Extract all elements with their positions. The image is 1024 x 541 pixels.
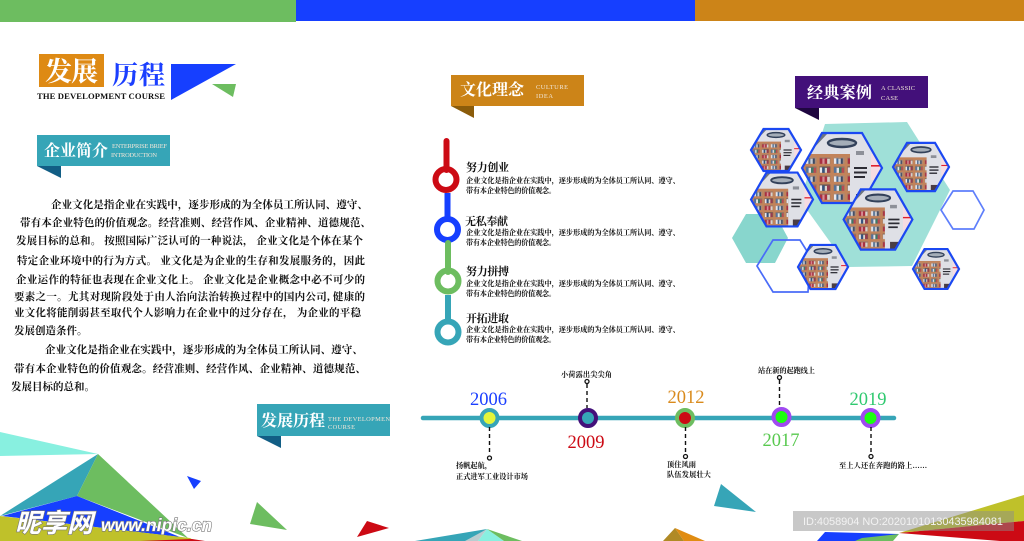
- heading ribbon: a classic case: 经典案例: [807, 83, 872, 102]
- text block: value 2: [465, 214, 680, 247]
- heading ribbon: culture idea: IDEA: [536, 93, 553, 100]
- text block: value 1: [465, 160, 680, 195]
- watermark: nipic logo: www.nipic.cn: [101, 515, 212, 535]
- text block: enterprise culture body copy: [11, 198, 371, 393]
- text block: value 1: 企业文化是指企业在实践中，逐步形成的为全体员工所认同、遵守、: [466, 176, 680, 186]
- text block: enterprise culture body copy: 特定企业环境中的行为方式。 业文化是为企业的生存和发展服务的，因此: [17, 254, 366, 267]
- timeline axis: [423, 416, 894, 420]
- decoration: scattered triangles: [187, 476, 756, 537]
- text block: value 4: 带有本企业特色的价值观念。: [465, 335, 556, 344]
- milestone 2012: 顶住风雨: [667, 460, 696, 469]
- text block: value 1: 努力创业: [466, 160, 509, 174]
- text block: value 1: 带有本企业特色的价值观念。: [465, 186, 556, 195]
- value marker: red: [436, 141, 456, 190]
- milestone 2019: 2019: [850, 390, 886, 410]
- text block: enterprise culture body copy: 业文化将能削弱甚至取代个人影响力在企业中的过分存在， 为企业的平稳: [14, 306, 362, 319]
- top colour bar: [0, 0, 1024, 22]
- heading ribbon: enterprise introduction: 企业简介: [44, 141, 108, 160]
- text block: value 4: [465, 311, 680, 344]
- text block: enterprise culture body copy: 带有本企业特色的价值观念。经营准则、经营作风、企业精神、道德规范、: [13, 362, 366, 375]
- vertical value timeline: [436, 141, 458, 342]
- milestone 2017: 2017: [762, 431, 800, 451]
- title: the development course: 发展: [45, 57, 98, 87]
- heading ribbon: a classic case: A CLASSIC: [881, 85, 915, 92]
- watermark: image id: ID:4058904 NO:20201010130435984081: [803, 516, 1003, 528]
- heading ribbon: development course: COURSE: [328, 424, 355, 431]
- decoration: bottom centre polygons: [415, 528, 705, 541]
- text block: value 2: 带有本企业特色的价值观念。: [465, 238, 556, 247]
- milestone 2006: 扬帆起航，: [456, 461, 492, 471]
- heading ribbon: a classic case: CASE: [881, 95, 898, 102]
- heading ribbon: culture idea: [451, 75, 584, 118]
- milestone 2012: [667, 388, 712, 479]
- title: the development course: 历程: [112, 61, 165, 90]
- milestone 2012: 2012: [668, 388, 704, 408]
- heading ribbon: enterprise introduction: ENTERPRISE BRIEF: [112, 143, 167, 150]
- icon: title triangles: [171, 64, 236, 100]
- milestone 2006: 2006: [470, 390, 507, 410]
- milestone 2012: 队伍发展壮大: [667, 470, 712, 479]
- heading ribbon: enterprise introduction: INTRODUCTION: [111, 152, 157, 159]
- text block: enterprise culture body copy: 发展创造条件。: [14, 324, 88, 337]
- watermark: nipic logo: 昵享网: [15, 503, 97, 540]
- milestone 2009: 2009: [568, 433, 604, 453]
- milestone 2009: [561, 370, 612, 453]
- text block: value 4: 开拓进取: [466, 311, 509, 325]
- milestone 2009: 小荷露出尖尖角: [561, 370, 612, 379]
- background hexagons: [732, 122, 950, 267]
- title: the development course: THE DEVELOPMENT COURSE: [37, 91, 165, 101]
- text block: enterprise culture body copy: 企业文化是指企业在实践中，逐步形成的为全体员工所认同、遵守、: [51, 198, 368, 211]
- text block: value 3: 企业文化是指企业在实践中，逐步形成的为全体员工所认同、遵守、: [466, 279, 680, 289]
- text block: enterprise culture body copy: 企业运作的特征也表现在企业文化上。 企业文化是企业概念中必不可少的: [16, 273, 366, 286]
- photo hexagons of library shelves: [751, 129, 959, 289]
- heading ribbon: development course: THE DEVELOPMEN: [328, 416, 390, 423]
- milestone 2019: [839, 390, 927, 470]
- heading ribbon: development course: [257, 404, 390, 448]
- text block: enterprise culture body copy: 发展目标的总和。: [11, 380, 95, 393]
- milestone 2006: 正式进军工业设计市场: [456, 472, 528, 481]
- heading ribbon: enterprise introduction: [37, 135, 170, 178]
- text block: enterprise culture body copy: 要素之一。尤其对现阶段处于由人治向法治转换过程中的国内公司, 健康的: [14, 290, 366, 303]
- title: the development course: [37, 54, 165, 101]
- heading ribbon: culture idea: CULTURE: [536, 84, 568, 91]
- decoration: bottom left polygons: [0, 432, 205, 541]
- text block: enterprise culture body copy: 发展目标的总和。 按照国际广泛认可的一种说法， 企业文化是个体在某个: [16, 234, 364, 247]
- watermark: image id: [793, 511, 1014, 531]
- value marker: green: [438, 243, 458, 292]
- outline hexagons: [757, 191, 984, 292]
- value marker: blue: [437, 193, 458, 240]
- decoration: bottom right polygons: [817, 495, 1024, 541]
- value marker: teal: [438, 295, 458, 342]
- heading ribbon: a classic case: [795, 76, 928, 120]
- hexagon photo cluster: [732, 122, 984, 292]
- heading ribbon: culture idea: 文化理念: [460, 80, 525, 99]
- text block: value 2: 无私奉献: [465, 214, 509, 228]
- milestone 2017: 站在新的起跑线上: [758, 366, 815, 375]
- text block: value 3: 带有本企业特色的价值观念。: [465, 289, 556, 298]
- text block: value 4: 企业文化是指企业在实践中，逐步形成的为全体员工所认同、遵守、: [466, 325, 680, 335]
- text block: value 2: 企业文化是指企业在实践中，逐步形成的为全体员工所认同、遵守、: [466, 228, 680, 238]
- milestone 2006: [456, 390, 528, 481]
- text block: enterprise culture body copy: 企业文化是指企业在实践中，逐步形成的为全体员工所认同、遵守、: [45, 343, 363, 356]
- milestone 2019: 至上人还在奔跑的路上……: [839, 461, 927, 470]
- milestone 2017: [758, 366, 815, 451]
- text block: value 3: 努力拼搏: [466, 264, 509, 278]
- text block: enterprise culture body copy: 带有本企业特色的价值观念。经营准则、经营作风、企业精神、道德规范、: [19, 216, 371, 229]
- watermark: nipic logo: [15, 503, 212, 540]
- text block: value 3: [465, 264, 680, 298]
- horizontal timeline: [423, 366, 927, 481]
- heading ribbon: development course: 发展历程: [261, 412, 325, 430]
